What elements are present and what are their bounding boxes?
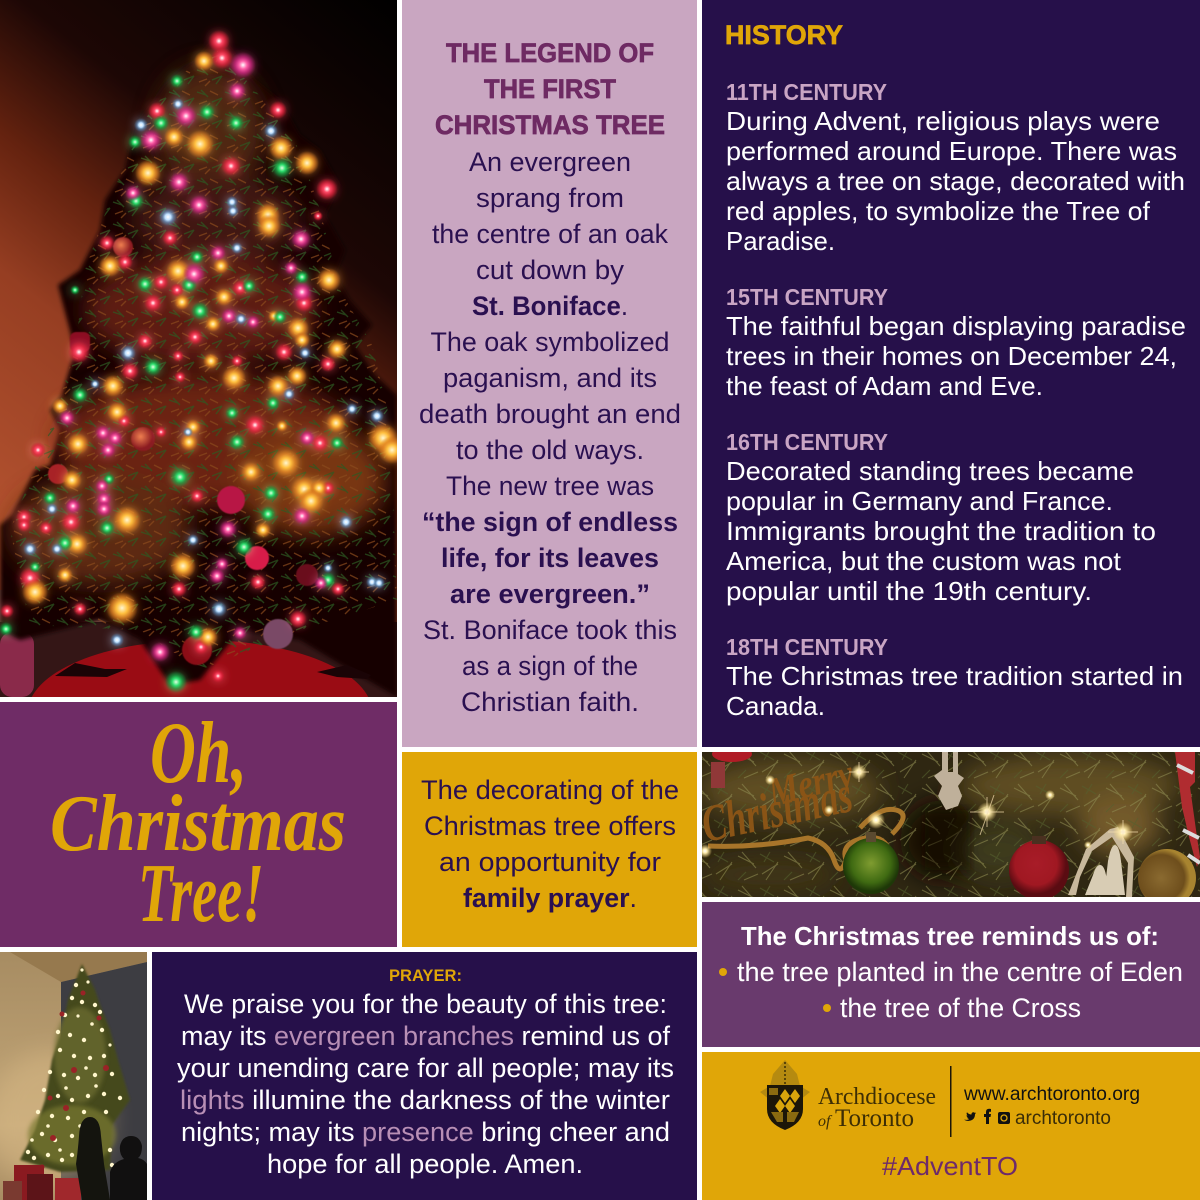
- prayer text: lights illumine the darkness of the winter: [180, 1085, 670, 1115]
- green bauble: [843, 838, 899, 894]
- icon: twitter: [964, 1112, 976, 1121]
- legend heading: THE LEGEND OF: [446, 38, 654, 68]
- callout text: Christmas tree offers: [424, 811, 676, 841]
- legend story text: The new tree was: [446, 471, 654, 501]
- pine needle texture: [702, 752, 1200, 897]
- 11th century entry: performed around Europe. There was: [726, 136, 1177, 166]
- callout text: family prayer.: [463, 883, 637, 913]
- legend story text: life, for its leaves: [441, 543, 659, 573]
- prayer text: We praise you for the beauty of this tree:: [184, 989, 667, 1019]
- legend story text: sprang from: [476, 183, 624, 213]
- icon: facebook: [984, 1109, 991, 1124]
- 11th century entry: Paradise.: [726, 226, 835, 256]
- legend heading: THE FIRST: [484, 74, 616, 104]
- reminder list: the tree of the Cross: [840, 993, 1081, 1023]
- Merry Christmas ornament: Merry: [762, 750, 858, 815]
- orange lights: [22, 51, 406, 647]
- white ornament: [934, 752, 964, 810]
- prayer text: your unending care for all people; may its: [177, 1053, 674, 1083]
- legend story text: as a sign of the: [462, 651, 638, 681]
- icon: archdiocese crest: [760, 1060, 810, 1130]
- legend story text: [419, 147, 681, 717]
- logo wordmark: Archdiocese: [818, 1084, 936, 1110]
- title: Oh, Christmas Tree!: Christmas: [50, 780, 346, 868]
- 16th century entry: Immigrants brought the tradition to: [726, 516, 1156, 546]
- legend story text: The oak symbolized: [430, 327, 670, 357]
- legend story text: are evergreen.”: [450, 579, 650, 609]
- photo: ornaments close-up: [697, 750, 1200, 897]
- tree ornaments: [40, 990, 109, 1170]
- white and blue lights: [23, 98, 385, 647]
- photo: children looking at a tall tree: [0, 952, 147, 1200]
- prayer text: [177, 989, 674, 1179]
- all tree lights: [0, 30, 406, 693]
- legend story text: St. Boniface.: [472, 291, 628, 321]
- website: www.archtoronto.org: [963, 1084, 1140, 1105]
- prayer text: may its evergreen branches remind us of: [181, 1021, 670, 1051]
- Merry Christmas ornament: Christmas: [697, 766, 857, 854]
- branch needles: [10, 50, 397, 670]
- 15th century entry: 15TH CENTURY: [726, 284, 888, 310]
- photo: large illuminated Christmas tree: [0, 0, 397, 697]
- reminder heading: The Christmas tree reminds us of:: [741, 921, 1159, 951]
- title: Oh, Christmas Tree!: [50, 705, 346, 940]
- panel: logo and contact: [702, 1052, 1200, 1200]
- prayer text: nights; may its presence bring cheer and: [181, 1117, 670, 1147]
- 16th century entry: [726, 429, 1156, 606]
- hashtag: #AdventTO: [882, 1151, 1018, 1181]
- callout text: an opportunity for: [439, 847, 661, 877]
- 16th century entry: 16TH CENTURY: [726, 429, 888, 455]
- 15th century entry: The faithful began displaying paradise: [726, 311, 1186, 341]
- panel: legend of the first Christmas tree: [402, 0, 697, 747]
- 11th century entry: 11TH CENTURY: [726, 79, 887, 105]
- legend heading: CHRISTMAS TREE: [435, 110, 665, 140]
- 11th century entry: [726, 79, 1185, 256]
- top red bauble: [712, 746, 752, 762]
- presents: [14, 1165, 44, 1200]
- panel: reminders: [702, 902, 1200, 1047]
- prayer text: hope for all people. Amen.: [267, 1149, 583, 1179]
- candy cane: [1175, 752, 1200, 867]
- legend story text: paganism, and its: [443, 363, 657, 393]
- 11th century entry: During Advent, religious plays were: [726, 106, 1160, 136]
- legend story text: the centre of an oak: [432, 219, 668, 249]
- panel: family prayer callout: [402, 752, 697, 947]
- 16th century entry: Decorated standing trees became: [726, 456, 1134, 486]
- shadows on tree skirt: [55, 663, 371, 679]
- logo wordmark: [818, 1084, 936, 1132]
- tree lights: [26, 968, 122, 1167]
- icon: instagram: [998, 1112, 1010, 1124]
- light glow: [0, 30, 406, 693]
- legend story text: Christian faith.: [461, 687, 639, 717]
- prayer heading: PRAYER:: [389, 966, 462, 985]
- panel: prayer: [152, 952, 697, 1200]
- legend heading: [435, 38, 665, 140]
- 18th century entry: Canada.: [726, 691, 825, 721]
- legend story text: death brought an end: [419, 399, 681, 429]
- callout text: [421, 775, 679, 913]
- legend story text: St. Boniface took this: [423, 615, 677, 645]
- logo wordmark: of: [818, 1113, 833, 1130]
- title: Oh, Christmas Tree!: Oh,: [150, 705, 247, 802]
- title: Oh, Christmas Tree!: Tree!: [138, 847, 264, 940]
- gold bauble: [1138, 849, 1196, 907]
- red bauble: [1009, 840, 1069, 900]
- 11th century entry: red apples, to symbolize the Tree of: [726, 196, 1151, 226]
- 16th century entry: popular in Germany and France.: [726, 486, 1113, 516]
- 15th century entry: the feast of Adam and Eve.: [726, 371, 1043, 401]
- 16th century entry: popular until the 19th century.: [726, 576, 1092, 606]
- 18th century entry: The Christmas tree tradition started in: [726, 661, 1183, 691]
- ornaments: [48, 237, 318, 665]
- legend story text: “the sign of endless: [422, 507, 678, 537]
- reminder list: the tree planted in the centre of Eden: [737, 957, 1183, 987]
- 15th century entry: [726, 284, 1186, 401]
- 18th century entry: [726, 634, 1183, 721]
- 18th century entry: 18TH CENTURY: [726, 634, 888, 660]
- red lights: [0, 30, 345, 683]
- legend story text: to the old ways.: [456, 435, 644, 465]
- legend story text: cut down by: [476, 255, 625, 285]
- pink lights: [59, 52, 328, 662]
- sparkling lights: [698, 764, 1133, 858]
- history heading: HISTORY: [725, 20, 843, 50]
- nativity: [1068, 827, 1134, 897]
- 11th century entry: always a tree on stage, decorated with: [726, 166, 1185, 196]
- panel: title: [0, 702, 397, 947]
- panel: history: [702, 0, 1200, 747]
- callout text: The decorating of the: [421, 775, 679, 805]
- legend story text: An evergreen: [469, 147, 631, 177]
- 16th century entry: America, but the custom was not: [726, 546, 1122, 576]
- social handle: archtoronto: [1015, 1108, 1111, 1129]
- children silhouettes: [76, 1117, 110, 1200]
- logo wordmark: Toronto: [835, 1105, 914, 1132]
- 15th century entry: trees in their homes on December 24,: [726, 341, 1177, 371]
- green lights: [0, 74, 344, 693]
- reminder list: [719, 957, 1183, 1023]
